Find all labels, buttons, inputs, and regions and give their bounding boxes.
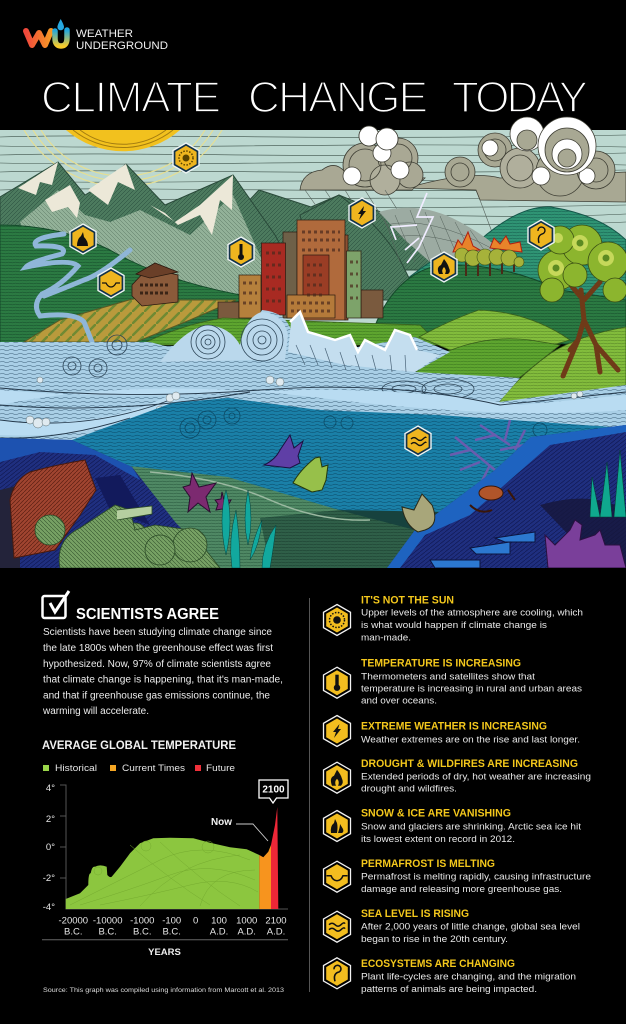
y axis labels: -4° xyxy=(43,902,55,913)
callout: now xyxy=(211,817,268,841)
x axis labels: B.C. xyxy=(133,926,152,938)
x axis labels: 0 xyxy=(193,916,198,926)
item: sea level xyxy=(324,908,580,945)
chart axes xyxy=(60,785,288,909)
item: ecosystems xyxy=(324,958,576,995)
item: temperature: and over oceans. xyxy=(361,696,437,707)
item: not the sun xyxy=(324,594,583,644)
seaweed xyxy=(222,490,276,568)
x axis labels: 2100 xyxy=(265,916,287,926)
header logo xyxy=(26,19,168,52)
item: drought and wildfires: drought and wildfires. xyxy=(361,784,457,795)
item: ecosystems: patterns of animals are being impacted. xyxy=(361,984,537,995)
panel: average global temperature chart xyxy=(42,738,288,994)
legend xyxy=(43,763,235,774)
starfish xyxy=(183,473,231,514)
back hills xyxy=(370,265,626,345)
body text: Scientists have been studying climate change since xyxy=(43,627,272,638)
header logo: WEATHER xyxy=(76,28,133,40)
x axis labels: 100 xyxy=(211,916,227,926)
body text: that climate change is happening, that it's man-made, xyxy=(43,674,283,686)
body text xyxy=(42,627,283,717)
fish: purple xyxy=(264,435,303,468)
purple coral xyxy=(545,520,626,568)
center hill with storm xyxy=(300,195,503,300)
panel: scientists agree xyxy=(42,591,283,717)
right hill xyxy=(400,207,626,340)
item: permafrost: damage and releasing more greenhouse gas. xyxy=(361,884,562,895)
breaking wave foam xyxy=(288,312,440,372)
item: not the sun: IT'S NOT THE SUN xyxy=(361,594,454,606)
black lower panel xyxy=(0,568,626,1024)
item: permafrost xyxy=(324,858,591,895)
illustration: climate landscape xyxy=(0,126,626,568)
item: permafrost: PERMAFROST IS MELTING xyxy=(361,858,495,870)
item: snow and ice: SNOW & ICE ARE VANISHING xyxy=(361,808,511,820)
x axis labels: B.C. xyxy=(98,926,117,938)
item: temperature xyxy=(324,658,582,707)
rain lines xyxy=(305,190,495,240)
item: ecosystems: ECOSYSTEMS ARE CHANGING xyxy=(361,958,515,970)
callout: 2100: 2100 xyxy=(262,784,285,796)
item: snow and ice: Snow and glaciers are shrinking. Arctic sea ice hit xyxy=(361,821,581,832)
area: current times xyxy=(259,845,271,909)
title: CHANGE xyxy=(248,73,428,122)
item: drought and wildfires: Extended periods of dry, hot weather are increasing xyxy=(361,772,591,783)
y axis labels: 0° xyxy=(46,842,55,853)
item: snow and ice xyxy=(324,808,581,845)
body text: hypothesized. Now, 97% of climate scientists agree xyxy=(43,659,271,670)
crab xyxy=(470,486,515,512)
cloud tops over header xyxy=(359,117,596,175)
item: extreme weather: EXTREME WEATHER IS INCREASING xyxy=(361,720,547,732)
black upper band xyxy=(0,0,626,130)
legend: Historical xyxy=(55,763,97,774)
title: TODAY xyxy=(452,73,588,122)
right seaweed xyxy=(590,450,626,517)
callout: now: Now xyxy=(211,817,232,828)
item: extreme weather xyxy=(324,716,580,746)
left rock xyxy=(0,438,220,568)
item: not the sun: man-made. xyxy=(361,633,411,644)
x axis labels: A.D. xyxy=(237,926,256,938)
x axis labels: B.C. xyxy=(162,926,181,938)
panel: evidence list xyxy=(324,594,591,995)
body text: warming will accelerate. xyxy=(42,706,149,717)
house xyxy=(132,263,178,306)
body text: and that if greenhouse gas emissions continue, the xyxy=(43,690,270,702)
area: historical xyxy=(66,838,259,909)
x axis labels: A.D. xyxy=(267,926,285,938)
clam xyxy=(402,494,435,532)
item: extreme weather: Weather extremes are on the rise and last longer. xyxy=(361,734,580,745)
item: sea level: After 2,000 years of little change, global sea level xyxy=(361,922,580,933)
item: snow and ice: its lowest extent on record in 2012. xyxy=(361,834,515,845)
y axis labels xyxy=(43,783,55,913)
branching coral xyxy=(450,420,525,485)
river xyxy=(26,234,130,342)
tree xyxy=(538,225,626,376)
title xyxy=(41,73,588,122)
right rock xyxy=(387,425,626,568)
item: drought and wildfires: DROUGHT & WILDFIRES ARE INCREASING xyxy=(361,758,578,770)
red kelp xyxy=(10,460,96,558)
fish: green xyxy=(293,457,328,492)
title: CLIMATE xyxy=(41,73,221,122)
green seabed xyxy=(120,465,447,568)
heading: SCIENTISTS AGREE xyxy=(76,606,219,623)
item: temperature: TEMPERATURE IS INCREASING xyxy=(361,658,521,670)
x axis labels: A.D. xyxy=(210,926,228,938)
wildfire trees xyxy=(453,232,524,276)
icon: checkbox xyxy=(42,591,69,618)
lightning xyxy=(391,193,433,263)
clouds xyxy=(300,126,626,202)
callout: 2100 xyxy=(259,780,288,803)
legend: Current Times xyxy=(122,763,185,774)
x axis labels: -10000 xyxy=(93,916,122,926)
deep water xyxy=(72,398,626,567)
x axis labels: B.C. xyxy=(64,926,83,938)
x axis labels: -20000 xyxy=(59,916,88,926)
green coral xyxy=(35,505,220,568)
item: drought and wildfires xyxy=(324,758,591,795)
x axis labels: -1000 xyxy=(130,916,154,926)
item: temperature: temperature is increasing in rural and urban areas xyxy=(361,684,582,695)
header logo: UNDERGROUND xyxy=(76,40,168,52)
item: not the sun: is what would happen if climate change is xyxy=(361,620,547,631)
y axis labels: 4° xyxy=(46,783,55,794)
x axis labels: -100 xyxy=(162,916,181,926)
y axis labels: -2° xyxy=(43,873,55,884)
item: ecosystems: Plant life-cycles are changing, and the migration xyxy=(361,971,576,982)
item: temperature: Thermometers and satellites show that xyxy=(361,671,535,682)
item: permafrost: Permafrost is melting rapidly, causing infrastructure xyxy=(361,872,591,883)
left hills xyxy=(0,225,270,345)
item: sea level: began to rise in the 20th century. xyxy=(361,934,508,945)
chart heading: AVERAGE GLOBAL TEMPERATURE xyxy=(42,738,236,752)
area: future xyxy=(271,807,278,909)
legend: Future xyxy=(206,763,235,774)
y axis labels: 2° xyxy=(46,814,55,825)
source: Source: This graph was compiled using information from Marcott et al. 2013 xyxy=(43,987,284,994)
map icons xyxy=(70,143,554,456)
sky xyxy=(0,130,626,330)
buildings xyxy=(218,220,383,320)
surface water xyxy=(0,310,626,440)
item: not the sun: Upper levels of the atmosphere are cooling, which xyxy=(361,608,583,619)
green hills xyxy=(140,310,626,402)
x axis labels: 1000 xyxy=(236,916,257,926)
x axis labels xyxy=(59,916,287,938)
mountains xyxy=(0,162,440,320)
x axis title: YEARS xyxy=(148,947,181,958)
item: sea level: SEA LEVEL IS RISING xyxy=(361,908,469,920)
body text: the late 1800s when the greenhouse effect was first xyxy=(43,643,273,654)
sun xyxy=(24,130,222,186)
